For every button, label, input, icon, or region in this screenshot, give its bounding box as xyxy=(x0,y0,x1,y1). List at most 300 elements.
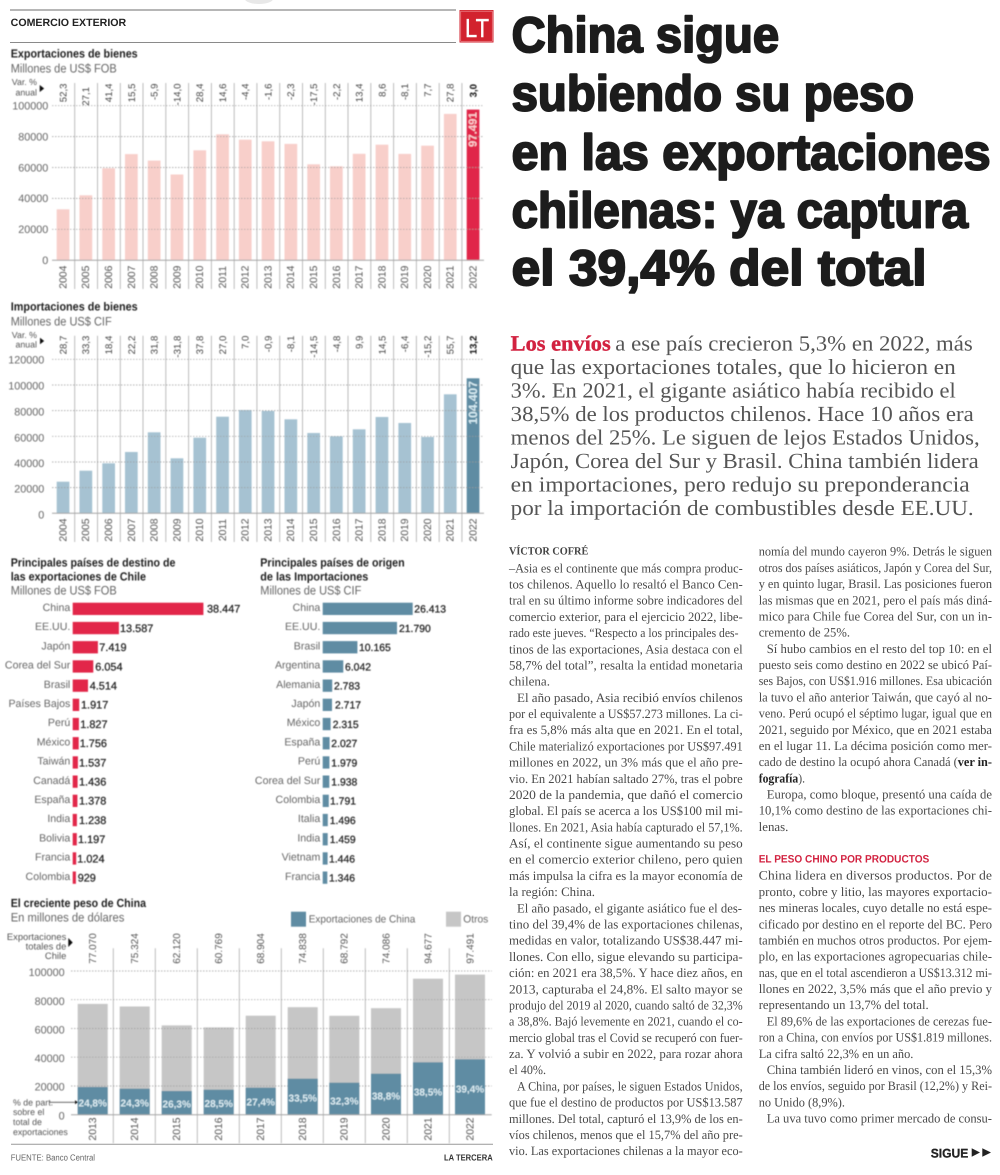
annotation: % de participacion: sobre el xyxy=(13,1107,44,1117)
heading: origenes: de las Importaciones xyxy=(260,570,369,584)
annotation: % de participacion: exportaciones xyxy=(13,1127,68,1137)
article column 1: fra es 5,8% más alta que en 2021. En el total, xyxy=(509,723,743,737)
x axis years: exportaciones: 2010 xyxy=(195,265,206,289)
article column 1: –Asia es el continente que más compra produc- xyxy=(508,561,743,575)
annual variation labels: exportaciones: -2,3 xyxy=(286,84,297,100)
annual variation labels: exportaciones: 3,0 xyxy=(468,84,479,97)
label: variacion anual xyxy=(12,77,44,97)
values: destinos: 1.197 xyxy=(78,834,105,846)
heading: exportaciones: Exportaciones de bienes xyxy=(11,47,138,61)
values: origenes: 1.459 xyxy=(330,835,356,846)
x axis years: importaciones: 2014 xyxy=(286,518,297,542)
values: destinos: 1.238 xyxy=(79,815,106,827)
annual variation labels: exportaciones: 8,6 xyxy=(377,84,388,97)
annual variation labels: importaciones: 55,7 xyxy=(446,336,457,354)
country labels: destinos xyxy=(5,602,71,883)
heading: origenes xyxy=(260,556,405,598)
article column 2 continued: de los envíos, seguido por Brasil (12,2%) y Rei- xyxy=(759,1079,992,1093)
annual variation labels: importaciones: 28,7 xyxy=(58,336,69,354)
values: destinos: 1.436 xyxy=(79,776,106,788)
annual variation labels: importaciones: -6,4 xyxy=(400,335,411,352)
country labels: destinos: Colombia xyxy=(26,871,70,883)
annual variation labels: importaciones: -15,2 xyxy=(423,336,434,358)
article column 1: medidas en valor, totalizando US$38.447 mi- xyxy=(509,934,743,948)
country labels: origenes: Corea del Sur xyxy=(255,775,321,787)
country labels: origenes: Colombia xyxy=(276,794,320,806)
annual variation labels: importaciones: -8,1 xyxy=(286,336,297,352)
values: destinos: 7.419 xyxy=(99,642,127,654)
x axis years: peso de China: 2013 xyxy=(88,1117,99,1141)
country labels: origenes: Japón xyxy=(291,698,320,710)
article column 2: nomía del mundo cayeron 9%. Detrás le siguen xyxy=(759,545,993,559)
section header: COMERCIO EXTERIOR xyxy=(11,17,127,29)
x axis years: importaciones: 2018 xyxy=(377,518,388,542)
deck paragraph xyxy=(511,332,980,520)
heading: destinos: Principales países de destino de xyxy=(11,556,176,570)
country labels: destinos: México xyxy=(37,736,70,748)
x axis years: exportaciones: 2012 xyxy=(241,265,252,289)
x axis years: importaciones: 2010 xyxy=(195,518,206,542)
x axis years: peso de China: 2020 xyxy=(381,1117,392,1141)
x axis years: importaciones: 2007 xyxy=(127,518,138,542)
annual variation labels: exportaciones xyxy=(58,83,479,106)
annual variation labels: exportaciones: 27,8 xyxy=(446,84,457,102)
x axis years: exportaciones: 2013 xyxy=(263,265,274,289)
annual variation labels: exportaciones: -2,2 xyxy=(332,84,343,100)
totals labels: 62.120 xyxy=(172,933,183,964)
y axis: peso de China: 20000 xyxy=(35,1082,65,1094)
values: destinos: 38.447 xyxy=(207,604,240,616)
annual variation labels: importaciones: 37,8 xyxy=(195,336,206,354)
subheading: peso de China: En millones de dólares xyxy=(11,911,124,925)
annual variation labels: importaciones: 27,0 xyxy=(218,336,229,354)
label: variacion anual: anual xyxy=(15,340,37,350)
values: origenes: 1.346 xyxy=(329,874,355,884)
label: exportaciones totales: totales de xyxy=(26,940,66,952)
article column 1: za. Y volvió a subir en 2022, para rozar ahora xyxy=(509,1047,743,1061)
panel: exportaciones de bienes xyxy=(11,47,484,289)
y axis: peso de China: 80000 xyxy=(35,996,65,1008)
label: exportaciones totales xyxy=(7,931,73,961)
article column 2 continued: llones en 2022, 3,5% más que el año previo y xyxy=(759,982,993,996)
y axis: exportaciones xyxy=(12,100,48,267)
panel: importaciones de bienes xyxy=(8,300,484,542)
country labels: destinos: China xyxy=(43,602,70,614)
continuation marker: SIGUE: SIGUE xyxy=(931,1146,968,1160)
y axis: exportaciones: 20000 xyxy=(18,224,48,236)
title xyxy=(512,7,991,296)
annual variation labels: importaciones xyxy=(58,335,479,358)
label: exportaciones totales: Exportaciones xyxy=(7,931,67,942)
heading: destinos: Millones de US$ FOB xyxy=(11,584,117,598)
article column 1: millones. Del total, capturó el 13,9% de los en- xyxy=(509,1112,743,1126)
values: destinos: 4.514 xyxy=(90,680,117,692)
values: origenes: 2.315 xyxy=(333,720,359,731)
percent labels: 38,5% xyxy=(414,1088,442,1099)
totals labels: 74.838 xyxy=(298,933,309,964)
y axis: peso de China: 100000 xyxy=(29,967,65,979)
logo: LT: LT xyxy=(465,13,489,43)
article column 1: millones en 2022, un 3% más que el año pre- xyxy=(509,756,743,770)
legend xyxy=(291,912,488,927)
article column 2 continued: ron a China, con envíos por US$1.819 millones. xyxy=(759,1031,992,1045)
x axis years: exportaciones: 2019 xyxy=(400,265,411,289)
article column 1: El año pasado, Asia recibió envíos chilenos xyxy=(517,691,743,705)
annual variation labels: importaciones: -31,8 xyxy=(172,336,183,358)
country labels: origenes: Francia xyxy=(285,871,320,883)
country labels: origenes: Brasil xyxy=(294,640,320,652)
heading: peso de China: El creciente peso de China xyxy=(11,896,146,910)
y axis: importaciones: 0 xyxy=(38,510,44,522)
article column 2 continued: China también lideró en vinos, con el 15,3% xyxy=(767,1063,992,1077)
article column 2 continued: plo, en las exportaciones agropecuarias chile- xyxy=(759,950,992,964)
x axis years: importaciones: 2008 xyxy=(150,518,161,542)
percent labels: 38,8% xyxy=(372,1092,400,1103)
article column 1: el 40%. xyxy=(509,1063,546,1077)
deck paragraph: Los envíos xyxy=(511,332,611,356)
values: origenes: 10.165 xyxy=(359,643,391,654)
x axis years: peso de China: 2021 xyxy=(423,1117,434,1141)
country labels: origenes: India xyxy=(297,832,320,844)
x axis years: importaciones: 2004 xyxy=(58,518,69,542)
annual variation labels: importaciones: 31,8 xyxy=(150,336,161,354)
label: variacion anual xyxy=(12,330,44,350)
country labels: destinos: India xyxy=(47,813,70,825)
article column 1: vio. En 2021 habían saltado 27%, tras el pobre xyxy=(509,772,743,786)
x axis years: exportaciones: 2008 xyxy=(150,265,161,289)
title: en las exportaciones xyxy=(512,124,991,180)
values: destinos: 929 xyxy=(78,872,96,884)
x axis years: importaciones xyxy=(58,518,479,542)
country labels: origenes: México xyxy=(287,717,320,729)
article column 2: y en quinto lugar, Brasil. Las posiciones fueron xyxy=(759,577,993,591)
deck paragraph: a ese país crecieron 5,3% en 2022, más xyxy=(615,332,973,356)
article column 1: más impulsa la cifra es la mayor economía de xyxy=(509,869,743,883)
totals labels: 68.904 xyxy=(256,933,267,964)
values: destinos: 1.756 xyxy=(80,738,107,750)
article column 2: la tuvo el año anterior Taiwán, que cayó al no- xyxy=(759,690,992,704)
percent labels: 28,5% xyxy=(205,1099,233,1110)
article column 1: a 38,8%. Bajó levemente en 2021, cuando el co- xyxy=(509,1015,743,1029)
article column 1: vio. Las exportaciones chilenas a la mayor eco- xyxy=(509,1144,743,1158)
annual variation labels: exportaciones: -8,1 xyxy=(400,84,411,100)
label: variacion anual: Var. % xyxy=(12,330,37,340)
subheading: exportaciones: Millones de US$ FOB xyxy=(11,62,117,76)
article column 2: fografía). xyxy=(759,771,805,785)
panel: principales destinos de exportaciones xyxy=(5,556,240,884)
country labels: destinos: Francia xyxy=(35,852,70,864)
y axis: importaciones: 20000 xyxy=(14,484,44,496)
annual variation labels: importaciones: 7,0 xyxy=(241,336,252,349)
title: subiendo su peso xyxy=(512,66,914,122)
article column 1: El año pasado, el gigante asiático fue el des- xyxy=(517,901,742,915)
deck paragraph: 38,5% de los productos chilenos. Hace 10 años era xyxy=(511,402,974,426)
totals labels: 97.491 xyxy=(465,933,476,964)
values: origenes: 2.783 xyxy=(334,682,360,692)
totals labels xyxy=(88,933,476,964)
article column 1: la región: China. xyxy=(509,885,595,899)
percent labels xyxy=(79,1084,484,1110)
article column 2: mico para Chile fue Corea del Sur, con un in- xyxy=(759,610,992,624)
legend: Otros xyxy=(463,914,488,926)
deck paragraph: en importaciones, pero redujo su preponderancia xyxy=(511,472,970,496)
annual variation labels: importaciones: 33,3 xyxy=(81,336,92,354)
annotation: % de participacion: % de part. xyxy=(13,1098,53,1108)
x axis years: importaciones: 2021 xyxy=(446,518,457,542)
bar chart: exportaciones xyxy=(57,110,479,260)
deck paragraph: que las exportaciones totales, que lo hicieron en xyxy=(511,355,956,379)
country labels: origenes: España xyxy=(284,736,320,748)
country labels: origenes: Argentina xyxy=(275,660,320,672)
article column 2: cremento de 25%. xyxy=(759,626,850,640)
annotation: % de participacion xyxy=(13,1098,78,1137)
article column 2: Europa, como bloque, presentó una caída de xyxy=(767,788,992,802)
country labels: origenes: Vietnam xyxy=(282,852,320,864)
percent labels: 33,5% xyxy=(289,1094,317,1105)
values: origenes: 2.717 xyxy=(335,701,361,712)
y axis: importaciones: 100000 xyxy=(8,381,44,393)
x axis years: importaciones: 2013 xyxy=(263,518,274,542)
values: origenes: 1.496 xyxy=(330,816,356,827)
country labels: destinos: Bolivia xyxy=(39,832,70,844)
annual variation labels: exportaciones: 41,4 xyxy=(104,83,115,102)
label: variacion anual: Var. % xyxy=(12,77,37,87)
country labels: destinos: Perú xyxy=(48,717,70,729)
values: destinos: 1.917 xyxy=(81,700,108,712)
values: destinos: 13.587 xyxy=(120,623,153,635)
percent labels: 24,8% xyxy=(79,1098,107,1109)
deck paragraph: por la importación de combustibles desde EE.UU. xyxy=(511,496,974,520)
country labels: origenes xyxy=(255,602,321,883)
annual variation labels: exportaciones: 27,1 xyxy=(81,87,92,106)
article column 2: 10,1% como destino de las exportaciones chi- xyxy=(759,804,992,818)
footer rule and credits: FUENTE: Banco Central xyxy=(11,1152,95,1162)
subheading: el peso chino por productos: EL PESO CHINO POR PRODUCTOS xyxy=(759,854,929,866)
annual variation labels: exportaciones: -1,6 xyxy=(263,84,274,100)
x axis years: exportaciones: 2014 xyxy=(286,265,297,289)
annual variation labels: exportaciones: -14,0 xyxy=(172,84,183,105)
y axis: importaciones: 60000 xyxy=(14,432,44,444)
values: origenes: 6.042 xyxy=(345,662,371,673)
heading: origenes: Principales países de origen xyxy=(260,556,405,570)
country labels: destinos: Corea del Sur xyxy=(5,660,71,672)
title: chilenas: ya captura xyxy=(512,182,969,238)
x axis years: exportaciones: 2005 xyxy=(81,265,92,289)
x axis years: importaciones: 2012 xyxy=(241,518,252,542)
article column 2 continued: cificado por destino en el reporte del BC. Pero xyxy=(759,917,992,931)
article column 1: A China, por países, le siguen Estados Unidos, xyxy=(517,1079,743,1093)
title: el 39,4% del total xyxy=(512,240,927,296)
annual variation labels: importaciones: 22,2 xyxy=(127,336,138,354)
article column 1: tos chilenos. Aquello lo resaltó el Banco Cen- xyxy=(509,578,743,592)
x axis years: peso de China: 2017 xyxy=(256,1117,267,1141)
panel: el creciente peso de China xyxy=(7,896,492,1143)
x axis years: exportaciones: 2011 xyxy=(218,266,229,288)
bar chart: importaciones xyxy=(57,378,479,513)
y axis: exportaciones: 80000 xyxy=(18,131,48,143)
percent labels: 26,3% xyxy=(163,1099,191,1110)
article column 1: que fue el destino de productos por US$13.587 xyxy=(509,1096,743,1110)
y axis: peso de China xyxy=(29,967,65,1122)
article column 2 continued: La uva tuvo como primer mercado de consu- xyxy=(767,1112,992,1126)
article column 2 continued: representando un 13,7% del total. xyxy=(759,998,929,1012)
x axis years: importaciones: 2020 xyxy=(423,518,434,542)
annual variation labels: exportaciones: -4,4 xyxy=(241,83,252,100)
article column 2 continued: China lidera en diversos productos. Por de xyxy=(759,869,992,883)
x axis years: exportaciones: 2007 xyxy=(127,265,138,289)
x axis years: importaciones: 2011 xyxy=(218,519,229,541)
deck paragraph: Japón, Corea del Sur y Brasil. China también lidera xyxy=(511,449,979,473)
article column 1: chilena. xyxy=(509,675,550,689)
annual variation labels: exportaciones: 14,6 xyxy=(218,84,229,102)
x axis years: peso de China: 2019 xyxy=(340,1117,351,1141)
x axis years: importaciones: 2015 xyxy=(309,518,320,542)
country labels: origenes: Italia xyxy=(298,813,320,825)
article column 1: llones. Con ello, sigue elevando su participa- xyxy=(509,950,743,964)
values: destinos: 1.378 xyxy=(79,796,106,808)
country labels: origenes: EE.UU. xyxy=(285,621,320,633)
article column 1: Chile materializó exportaciones por US$97.491 xyxy=(509,739,743,753)
values: origenes: 1.791 xyxy=(330,797,356,808)
totals labels: 60.769 xyxy=(214,933,225,964)
percent labels: 24,3% xyxy=(121,1098,149,1109)
article column 1: 2020 de la pandemia, que dañó el comercio xyxy=(509,788,743,802)
y axis: exportaciones: 40000 xyxy=(18,193,48,205)
article column 2: cado de destino la ocupó ahora Canadá (ver in- xyxy=(759,755,992,769)
article column 1 xyxy=(508,561,743,1158)
values: origenes: 26.413 xyxy=(414,605,446,616)
x axis years: peso de China: 2018 xyxy=(298,1117,309,1141)
article column 2 continued: pronto, cobre y litio, las mayores exportacio- xyxy=(759,885,992,899)
values: origenes: 1.938 xyxy=(331,778,358,788)
article column 1: por el equivalente a US$57.273 millones. La ci- xyxy=(509,707,743,721)
x axis years: peso de China: 2022 xyxy=(465,1117,476,1141)
values: origenes xyxy=(329,605,446,884)
article column 2: en el lugar 11. La décima posición como mer- xyxy=(759,739,992,753)
percent labels: 27,4% xyxy=(247,1097,275,1108)
continuation marker: SIGUE xyxy=(931,1146,991,1160)
label: exportaciones totales: Chile xyxy=(45,950,66,961)
annual variation labels: importaciones: 9,9 xyxy=(355,336,366,349)
article column 2: 2021, seguido por México, que en 2021 estaba xyxy=(759,723,992,737)
panel: principales origenes de importaciones xyxy=(255,556,446,884)
subheading: importaciones: Millones de US$ CIF xyxy=(11,315,112,329)
legend: Exportaciones de China xyxy=(309,914,415,926)
y axis: peso de China: 60000 xyxy=(35,1024,65,1036)
annual variation labels: exportaciones: 52,3 xyxy=(58,84,69,102)
values: origenes: 2.027 xyxy=(331,739,358,750)
country labels: destinos: Taiwán xyxy=(37,756,70,768)
article column 2 continued: también en muchos otros productos. Por ejem- xyxy=(759,934,992,948)
annual variation labels: importaciones: 14,5 xyxy=(377,336,388,354)
x axis years: importaciones: 2019 xyxy=(400,518,411,542)
x axis years: peso de China: 2015 xyxy=(172,1117,183,1141)
y axis: importaciones: 120000 xyxy=(8,355,44,367)
x axis years: exportaciones: 2017 xyxy=(355,265,366,289)
title: China sigue xyxy=(512,7,779,63)
values: destinos xyxy=(77,604,240,884)
article column 1: ción: en 2021 era 38,5%. Y hace diez años, en xyxy=(509,966,743,980)
country labels: destinos: Canadá xyxy=(33,775,70,787)
x axis years: exportaciones: 2016 xyxy=(332,265,343,289)
article column 1: produjo del 2019 al 2020, cuando saltó de 32,3% xyxy=(509,998,743,1012)
x axis years: peso de China: 2014 xyxy=(130,1117,141,1141)
value label: 2022 exportaciones: 97.491 xyxy=(468,111,480,147)
heading: destinos: las exportaciones de Chile xyxy=(11,570,146,584)
article column 1: tral en su último informe sobre indicadores del xyxy=(509,594,743,608)
country labels: destinos: España xyxy=(34,794,70,806)
y axis: exportaciones: 0 xyxy=(42,255,48,267)
deck paragraph: 3%. En 2021, el gigante asiático había recibido el xyxy=(511,379,956,403)
country labels: origenes: Perú xyxy=(298,756,320,768)
x axis years: importaciones: 2017 xyxy=(355,518,366,542)
article column 2 continued: no Unido (8,9%). xyxy=(759,1095,845,1109)
article column 1: rado este jueves. “Respecto a los principales des- xyxy=(509,626,738,640)
x axis years: peso de China xyxy=(88,1117,476,1141)
annual variation labels: exportaciones: -17,5 xyxy=(309,84,320,105)
annual variation labels: importaciones: -0,9 xyxy=(263,336,274,352)
totals labels: 68.792 xyxy=(340,933,351,964)
article column 2: veno. Perú ocupó el séptimo lugar, igual que en xyxy=(759,707,993,721)
horizontal bars: destinos xyxy=(73,603,203,884)
article column 1: mercio global tras el Covid se recuperó con fuer- xyxy=(509,1031,743,1045)
x axis years: exportaciones xyxy=(58,265,479,289)
x axis years: importaciones: 2006 xyxy=(104,518,115,542)
values: origenes: 1.446 xyxy=(329,854,355,865)
heading: origenes: Millones de US$ CIF xyxy=(260,584,362,598)
x axis years: exportaciones: 2021 xyxy=(446,265,457,289)
values: destinos: 1.827 xyxy=(80,719,108,731)
article column 1: tinos de las exportaciones, Asia destaca con el xyxy=(509,642,743,656)
annual variation labels: importaciones: 13,2 xyxy=(468,336,479,354)
annual variation labels: exportaciones: 13,4 xyxy=(355,83,366,102)
values: destinos: 1.024 xyxy=(77,853,105,865)
heading: destinos xyxy=(11,556,176,598)
article column 1: 58,7% del total”, resalta la entidad monetaria xyxy=(509,658,743,672)
x axis years: exportaciones: 2018 xyxy=(377,265,388,289)
article column 1: global. El país se acerca a los US$100 mil mi- xyxy=(509,804,743,818)
totals labels: 77.070 xyxy=(88,933,99,964)
annual variation labels: exportaciones: 7,7 xyxy=(423,84,434,97)
y axis: exportaciones: 60000 xyxy=(18,162,48,174)
x axis years: exportaciones: 2022 xyxy=(468,265,479,289)
y axis: importaciones xyxy=(8,355,44,522)
values: destinos: 1.537 xyxy=(79,757,106,769)
country labels: destinos: Japón xyxy=(41,640,70,652)
article column 2: lenas. xyxy=(759,820,788,834)
totals labels: 74.086 xyxy=(381,933,392,964)
heading: importaciones: Importaciones de bienes xyxy=(11,300,138,314)
country labels: origenes: Alemania xyxy=(276,679,320,691)
x axis years: importaciones: 2016 xyxy=(332,518,343,542)
x axis years: exportaciones: 2020 xyxy=(423,265,434,289)
article column 1: Así, el continente sigue aumentando su peso xyxy=(509,836,743,850)
y axis: importaciones: 80000 xyxy=(14,406,44,418)
annual variation labels: importaciones: 18,4 xyxy=(104,335,115,354)
article column 2 continued xyxy=(759,869,993,1126)
y axis: importaciones: 40000 xyxy=(14,458,44,470)
x axis years: exportaciones: 2004 xyxy=(58,265,69,289)
percent labels: 32,3% xyxy=(330,1096,359,1107)
annual variation labels: importaciones: -14,5 xyxy=(309,336,320,358)
article column 2: Sí hubo cambios en el resto del top 10: en el xyxy=(767,642,992,656)
article column 2 continued: La cifra saltó 22,3% en un año. xyxy=(759,1047,913,1061)
x axis years: exportaciones: 2015 xyxy=(309,265,320,289)
stacked bars: exportaciones de China xyxy=(78,1059,485,1115)
x axis years: importaciones: 2005 xyxy=(81,518,92,542)
country labels: destinos: Brasil xyxy=(44,679,70,691)
annual variation labels: exportaciones: -5,9 xyxy=(150,84,161,100)
